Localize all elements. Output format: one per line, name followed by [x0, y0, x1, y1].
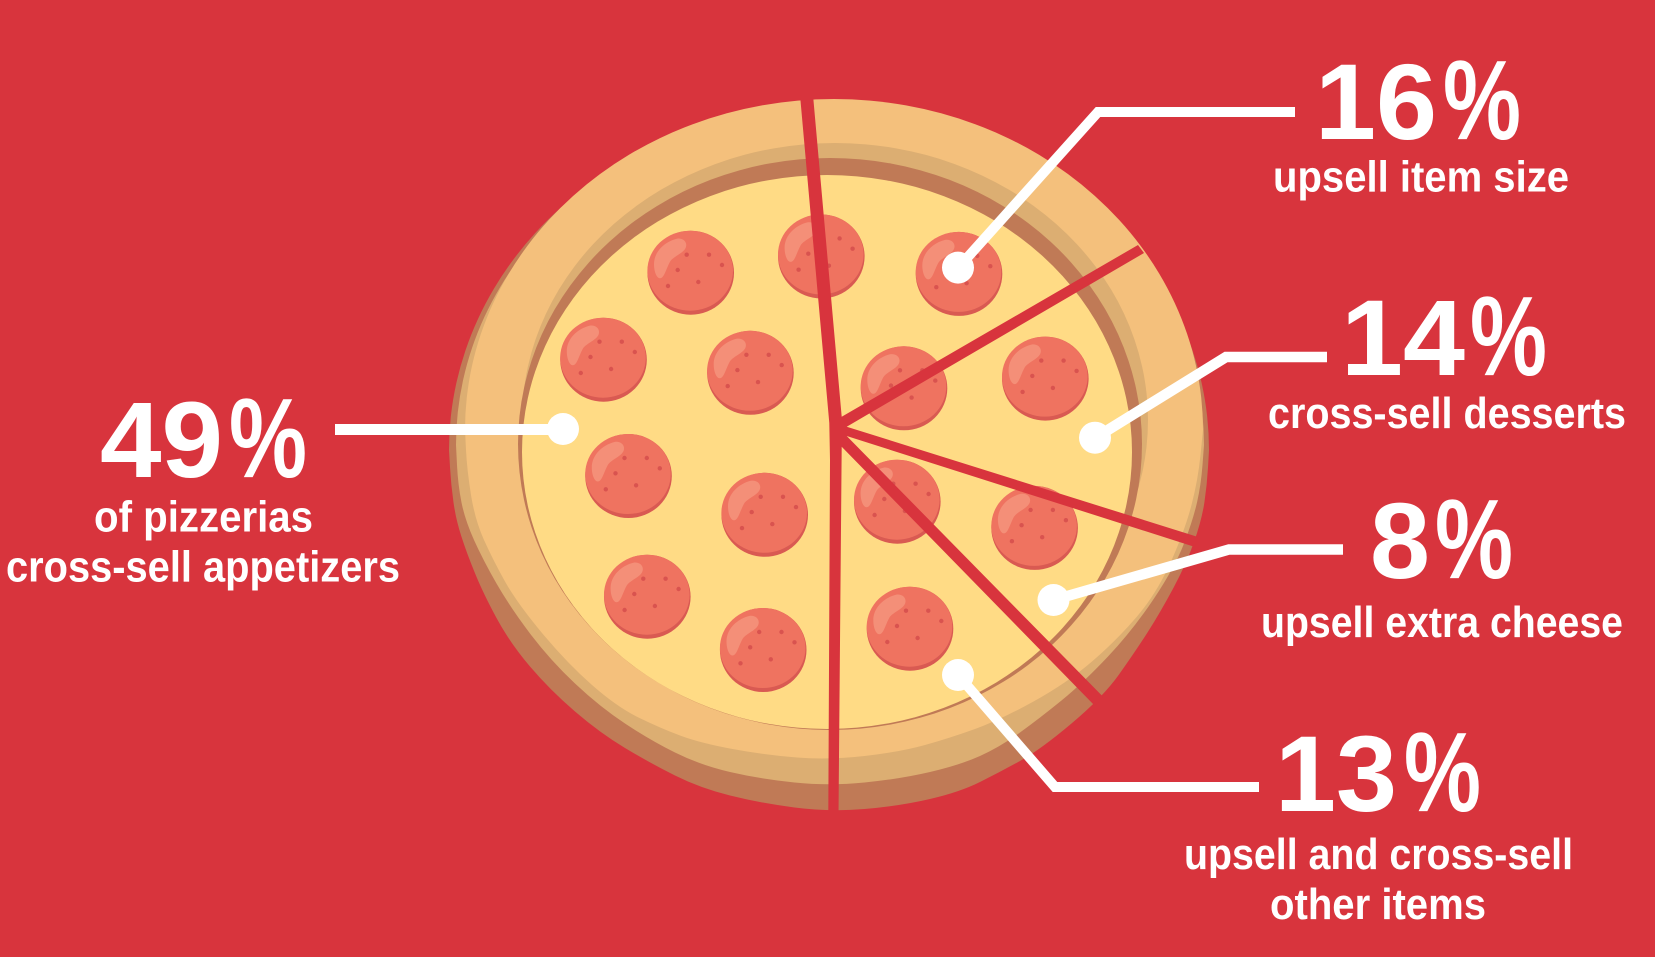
stat: 13% upsell and cross-sell other items: other items: [1270, 880, 1486, 929]
stat: 49% of pizzerias cross-sell appetizers: %: [229, 375, 307, 501]
stat: 14% cross-sell desserts: %: [1470, 273, 1547, 399]
stat: 16% upsell item size: upsell item size: [1273, 152, 1569, 202]
stat: 16% upsell item size: [1273, 37, 1569, 202]
inner crust mid shadow: [522, 143, 1148, 697]
stat: 13% upsell and cross-sell other items: 13: [1275, 713, 1397, 834]
stat: 14% cross-sell desserts: cross-sell desserts: [1268, 389, 1626, 438]
stat: 8% upsell extra cheese: upsell extra cheese: [1261, 598, 1623, 647]
cheese: [522, 175, 1132, 729]
inner crust dark ring: [518, 158, 1142, 730]
leader: 8%: [1038, 550, 1343, 616]
crust mid shadow: [456, 110, 1204, 784]
stat: 13% upsell and cross-sell other items: [1184, 709, 1573, 929]
stat: 49% of pizzerias cross-sell appetizers: 49: [100, 379, 223, 500]
stat: 49% of pizzerias cross-sell appetizers: [6, 375, 400, 592]
stat: 13% upsell and cross-sell other items: upsell and cross-sell: [1184, 830, 1573, 879]
slice cut lines: [800, 95, 1198, 815]
leader: 14%: [1079, 357, 1327, 454]
leader: 49%: [335, 413, 579, 445]
pizza illustration: [449, 95, 1209, 815]
stat: 16% upsell item size: 16: [1315, 41, 1437, 162]
stat: 14% cross-sell desserts: [1268, 273, 1626, 438]
stat: 13% upsell and cross-sell other items: %: [1404, 709, 1481, 835]
stat: 49% of pizzerias cross-sell appetizers: cross-sell appetizers: [6, 542, 400, 592]
stat: 14% cross-sell desserts: 14: [1341, 277, 1465, 398]
crust outer shadow: [449, 108, 1209, 810]
crust top: [465, 99, 1203, 758]
stat: 8% upsell extra cheese: %: [1435, 476, 1513, 602]
leader: 16%: [942, 112, 1295, 284]
stat: 16% upsell item size: %: [1443, 37, 1521, 163]
stat: 49% of pizzerias cross-sell appetizers: of pizzerias: [94, 492, 313, 542]
pepperoni toppings: [560, 214, 1089, 692]
stat: 8% upsell extra cheese: [1261, 476, 1623, 647]
leader: 13%: [942, 659, 1259, 787]
stat: 8% upsell extra cheese: 8: [1370, 480, 1430, 601]
